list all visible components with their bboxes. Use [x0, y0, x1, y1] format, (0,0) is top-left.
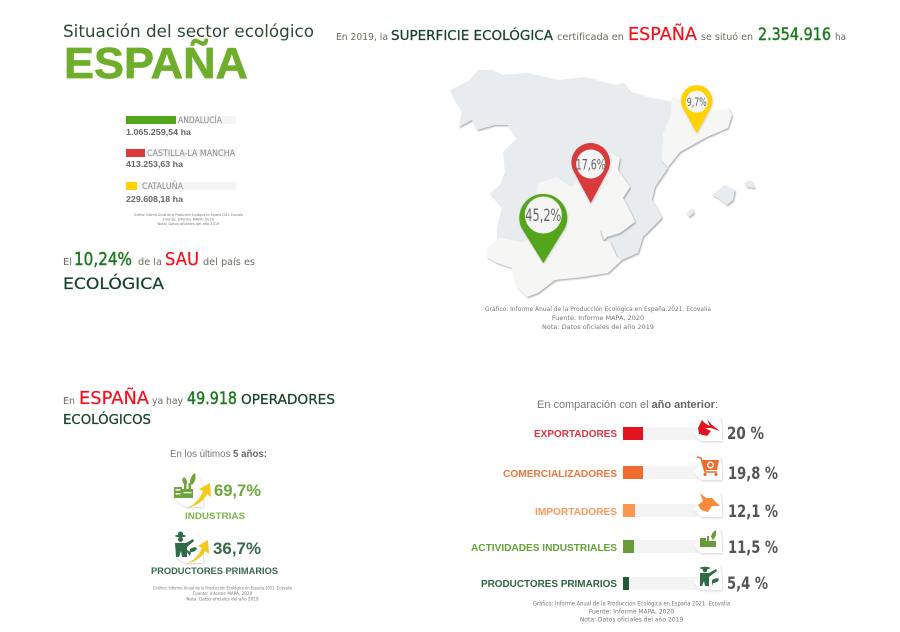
- heading: superficie ecológica: [336, 23, 846, 45]
- heading: operadores ecológicos: En: [63, 396, 75, 407]
- row: exportadores: 20 %: [727, 424, 764, 443]
- heading: superficie ecológica: En 2019, la: [336, 32, 388, 43]
- source note: Nota: Datos oficiales del año 2019: [580, 616, 683, 624]
- heading: operadores ecológicos: [63, 387, 335, 428]
- icon: industry: [694, 528, 722, 553]
- panel: últimos 5 años: [151, 449, 292, 602]
- source note: Gráfico: Informe Anual de la Producción Ecológica en España 2021. Ecovalia: [485, 305, 711, 313]
- ranking chart: top communities: [126, 114, 243, 226]
- value: productores primarios: 36,7%: [213, 539, 261, 558]
- panel: comparación con el año anterior: [471, 399, 778, 624]
- row: comercializadores: 19,8 %: [728, 464, 778, 483]
- bar: Castilla-La Mancha: CASTILLA-LA MANCHA: [147, 149, 235, 159]
- title: ESPAÑA: [64, 38, 248, 88]
- statement: SAU ecológica: del país es: [203, 257, 255, 268]
- row: productores primarios: [481, 565, 768, 593]
- row: productores primarios: 5,4 %: [727, 574, 768, 593]
- source note: [153, 586, 292, 602]
- source note: [485, 305, 711, 331]
- row: exportadores: EXPORTADORES: [534, 429, 617, 440]
- source note: Fuente: Informe MAPA, 2020: [193, 591, 253, 596]
- statement: SAU ecológica: [63, 250, 255, 293]
- heading: operadores ecológicos: OPERADORES: [241, 392, 335, 408]
- title: Situación del sector ecológico: [63, 22, 314, 41]
- statement: SAU ecológica: El: [63, 257, 72, 268]
- source note: Gráfico: Informe Anual de la Producción Ecológica en España 2021. Ecovalia: [153, 586, 292, 590]
- map of Spain: [450, 70, 755, 331]
- statement: SAU ecológica: ECOLÓGICA: [63, 274, 164, 293]
- bar: Cataluña: CATALUÑA: [142, 181, 183, 192]
- bar: Andalucía: [126, 114, 236, 137]
- label: industrias: INDUSTRIAS: [185, 511, 245, 522]
- heading: superficie ecológica: SUPERFICIE ECOLÓGICA: [391, 28, 553, 44]
- row: actividades industriales: 11,5 %: [728, 538, 778, 557]
- icon: industry with up arrow: [171, 473, 211, 508]
- icon: export: [694, 416, 722, 441]
- bar: Castilla-La Mancha: 413.253,63 ha: [126, 159, 183, 169]
- bar: Cataluña: 229.608,18 ha: [126, 194, 183, 204]
- pin: Cataluña 9,7%: [681, 85, 712, 133]
- statement: SAU ecológica: 10,24%: [74, 250, 132, 270]
- region: rest of Spain: [450, 70, 672, 260]
- pin: Castilla-La Mancha 17,6%: 17,6%: [576, 158, 606, 174]
- row: comercializadores: [503, 456, 778, 483]
- row: importadores: [535, 492, 778, 521]
- row: actividades industriales: ACTIVIDADES INDUSTRIALES: [471, 543, 617, 554]
- source note: Fuente: Informe MAPA, 2020: [163, 218, 215, 222]
- subheading: En los últimos 5 años:: [170, 449, 267, 460]
- bar: Cataluña: [126, 181, 236, 204]
- source note: Gráfico: Informe Anual de la Producción Ecológica en España 2021. Ecovalia: [134, 213, 243, 217]
- bar: Castilla-La Mancha: [126, 149, 236, 169]
- label: productores primarios: PRODUCTORES PRIMARIOS: [151, 566, 278, 577]
- heading: operadores ecológicos: 49.918: [187, 389, 237, 409]
- source note: Fuente: Informe MAPA, 2020: [552, 314, 644, 322]
- pin: Cataluña 9,7%: 9,7%: [687, 95, 707, 109]
- icon: import: [694, 492, 722, 517]
- heading: superficie ecológica: 2.354.916: [758, 25, 831, 45]
- source note: Gráfico: Informe Anual de la Producción Ecológica en España 2021. Ecovalia: [533, 600, 730, 608]
- row: productores primarios: PRODUCTORES PRIMARIOS: [481, 579, 617, 590]
- bar: Andalucía: 1.065.259,54 ha: [126, 127, 191, 137]
- region: Castilla-La Mancha: [530, 150, 635, 241]
- icon: cart: [694, 456, 722, 480]
- row: actividades industriales: [471, 528, 778, 557]
- pin: Andalucía 45,2%: 45,2%: [525, 206, 561, 226]
- row: exportadores: [534, 416, 764, 443]
- icon: farmer: [694, 565, 722, 590]
- pin: Castilla-La Mancha 17,6%: [571, 143, 610, 203]
- row: importadores: 12,1 %: [728, 502, 778, 521]
- value: industrias: 69,7%: [214, 481, 261, 500]
- source note: Nota: Datos oficiales del año 2019: [158, 222, 220, 226]
- heading: superficie ecológica: certificada en: [557, 32, 624, 43]
- source note: Nota: Datos oficiales del año 2019: [186, 596, 259, 602]
- source note: [134, 213, 243, 226]
- row: comercializadores: COMERCIALIZADORES: [503, 469, 617, 480]
- heading: superficie ecológica: ha: [835, 32, 846, 43]
- source note: Fuente: Informe MAPA, 2020: [589, 608, 674, 616]
- heading: superficie ecológica: se situó en: [701, 32, 753, 43]
- title: [63, 22, 314, 88]
- pin: Andalucía 45,2%: [519, 194, 567, 263]
- heading: superficie ecológica: ESPAÑA: [628, 23, 698, 45]
- subheading: En comparación con el año anterior:: [537, 399, 718, 411]
- row: importadores: IMPORTADORES: [535, 507, 617, 518]
- statement: SAU ecológica: SAU: [165, 250, 199, 270]
- heading: operadores ecológicos: ESPAÑA: [79, 387, 150, 409]
- bar: Andalucía: ANDALUCÍA: [178, 114, 222, 126]
- region: Baleares: [686, 180, 755, 217]
- statement: SAU ecológica: de la: [138, 257, 162, 268]
- source note: Nota: Datos oficiales del año 2019: [542, 323, 654, 331]
- region: Andalucía: [487, 230, 622, 297]
- source note: [533, 600, 730, 624]
- heading: operadores ecológicos: ya hay: [152, 396, 183, 407]
- region: Cataluña: [661, 97, 732, 167]
- heading: operadores ecológicos: ECOLÓGICOS: [63, 412, 151, 428]
- icon: farmer with up arrow: [171, 531, 209, 564]
